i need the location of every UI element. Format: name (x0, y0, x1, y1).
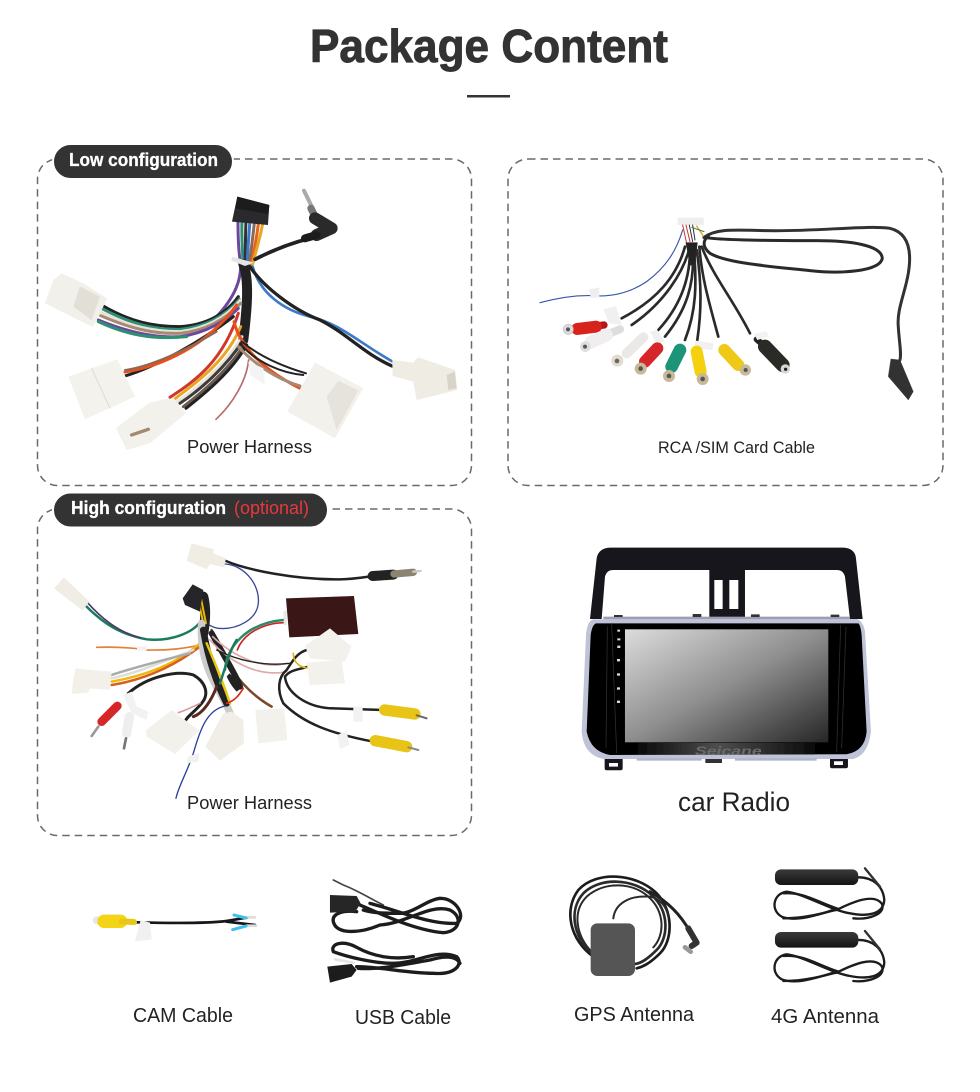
panel: low configuration (38, 144, 472, 486)
yellow plug 2 (724, 350, 751, 376)
black face (587, 623, 867, 755)
wire tie and label (231, 257, 254, 266)
white plug 1 (580, 329, 620, 352)
badge: low configuration (53, 144, 233, 179)
blue wire (540, 230, 683, 303)
label: gps antenna: GPS Antenna (574, 1004, 695, 1026)
connectors right (305, 628, 352, 685)
label: cam cable: CAM Cable (133, 1005, 233, 1027)
side buttons (617, 630, 620, 703)
item: gps antenna (570, 877, 697, 1026)
top connector (678, 218, 704, 243)
yellow rca plugs (375, 710, 427, 750)
red plug 2 (635, 348, 657, 375)
item: cam cable (97, 915, 256, 1027)
title: Package Content (310, 20, 668, 72)
antenna one (775, 868, 884, 919)
green plug (663, 350, 680, 382)
item: 4g antenna (771, 868, 884, 1028)
badge: high configuration optional: High configuration (71, 498, 226, 518)
antenna plug (373, 571, 421, 576)
gps antenna photo (570, 877, 697, 976)
audio jack (754, 331, 790, 374)
label: power harness: Power Harness (187, 437, 312, 457)
4g antenna photo (775, 868, 884, 981)
connector B (68, 359, 135, 419)
badge: high configuration optional: (optional) (234, 498, 309, 518)
wires fan (98, 220, 393, 419)
bottom connectors (146, 708, 287, 761)
connector left (54, 577, 89, 611)
plug labels (603, 306, 713, 350)
side ridges (606, 624, 846, 753)
connector C (116, 398, 186, 450)
antenna two (775, 931, 884, 981)
label: car radio: car Radio (678, 787, 790, 817)
black connector (183, 584, 203, 612)
yellow plug 1 (697, 352, 709, 385)
red rca plug (92, 706, 117, 736)
connector A (45, 273, 107, 327)
label: power harness: Power Harness (187, 793, 312, 813)
mounting tabs (605, 759, 623, 770)
item: usb cable (327, 880, 461, 1029)
reflection strip (638, 743, 815, 754)
antenna plug (304, 191, 332, 238)
badge: high configuration optional (53, 492, 328, 528)
badge: low configuration: Low configuration (69, 150, 218, 170)
brand: Seicane (695, 744, 762, 758)
top bezel (590, 548, 863, 619)
white rca plug (124, 717, 129, 748)
sim cable (704, 227, 910, 360)
cam cable photo (97, 915, 256, 941)
connector mid left (72, 668, 112, 694)
panel: car radio (582, 548, 871, 817)
rca sim cable photo (540, 218, 913, 400)
connector E (392, 357, 457, 400)
silver frame (582, 619, 871, 759)
connector D (287, 363, 363, 438)
panel: high configuration (38, 492, 472, 836)
red plug 1 (563, 324, 604, 334)
screen (625, 629, 828, 742)
panel: rca sim card cable (508, 159, 943, 486)
car radio device (582, 548, 871, 770)
power harness photo (45, 191, 457, 450)
white plug 2 (611, 337, 643, 367)
wires (83, 561, 384, 798)
decoder box (283, 596, 358, 637)
cable fan (622, 243, 750, 340)
high configuration harness photo (54, 543, 427, 798)
sim card plug (888, 359, 913, 400)
label: rca sim card cable: RCA /SIM Card Cable (658, 438, 815, 457)
mounting bumps (614, 614, 839, 617)
labels and junction (123, 646, 363, 763)
top black connector (232, 197, 269, 225)
connector top (187, 543, 226, 569)
label: usb cable: USB Cable (355, 1007, 451, 1029)
usb cable photo (327, 880, 461, 983)
label: 4g antenna: 4G Antenna (771, 1006, 880, 1028)
lower trim (637, 758, 817, 761)
